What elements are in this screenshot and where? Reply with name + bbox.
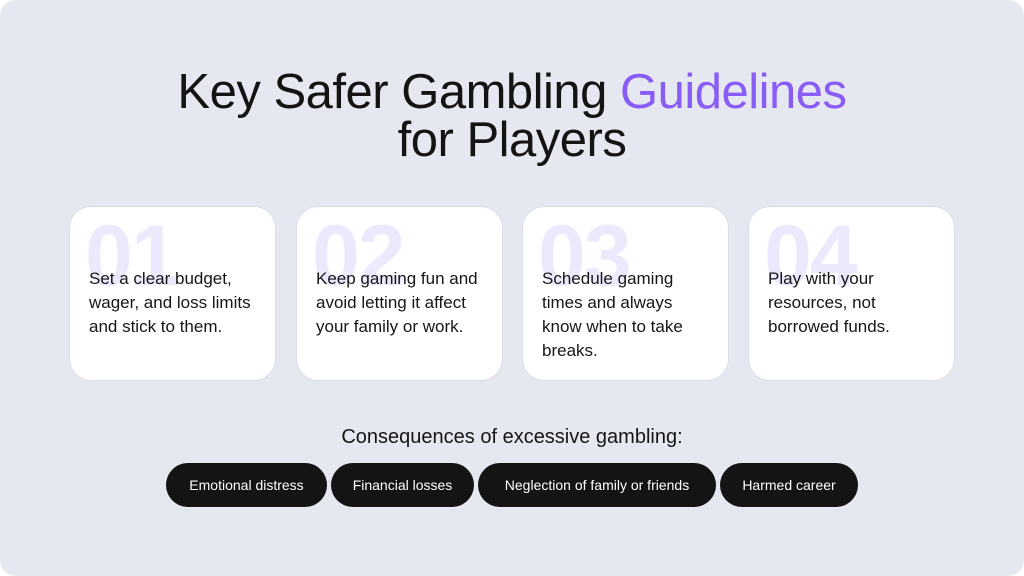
pill: emotional distress — [166, 463, 327, 507]
card 1 — [69, 206, 276, 381]
card 3: Schedule gaming times and always know when to take breaks. — [542, 269, 683, 360]
card 3: 03 — [538, 208, 630, 304]
card 3 — [522, 206, 729, 381]
title — [177, 65, 847, 167]
title: for Players — [398, 113, 626, 167]
pill: emotional distress: Emotional distress — [189, 477, 304, 493]
card 4 — [748, 206, 955, 381]
card 1: Set a clear budget, wager, and loss limits and stick to them. — [89, 269, 251, 336]
card 2 — [296, 206, 503, 381]
card 4: 04 — [764, 208, 856, 304]
card 1: 01 — [85, 208, 177, 304]
pill: financial losses — [331, 463, 474, 507]
card 4: Play with your resources, not borrowed funds. — [768, 269, 890, 336]
pill: harmed career: Harmed career — [742, 477, 836, 493]
pill: neglection: Neglection of family or friends — [505, 477, 689, 493]
pill: neglection — [478, 463, 716, 507]
pill: financial losses: Financial losses — [353, 477, 452, 493]
pill: harmed career — [720, 463, 858, 507]
card 2: Keep gaming fun and avoid letting it affect your family or work. — [316, 269, 478, 336]
card 2: 02 — [312, 208, 404, 304]
title: Key Safer Gambling Guidelines — [177, 65, 847, 119]
subheading: Consequences of excessive gambling: — [341, 426, 683, 448]
